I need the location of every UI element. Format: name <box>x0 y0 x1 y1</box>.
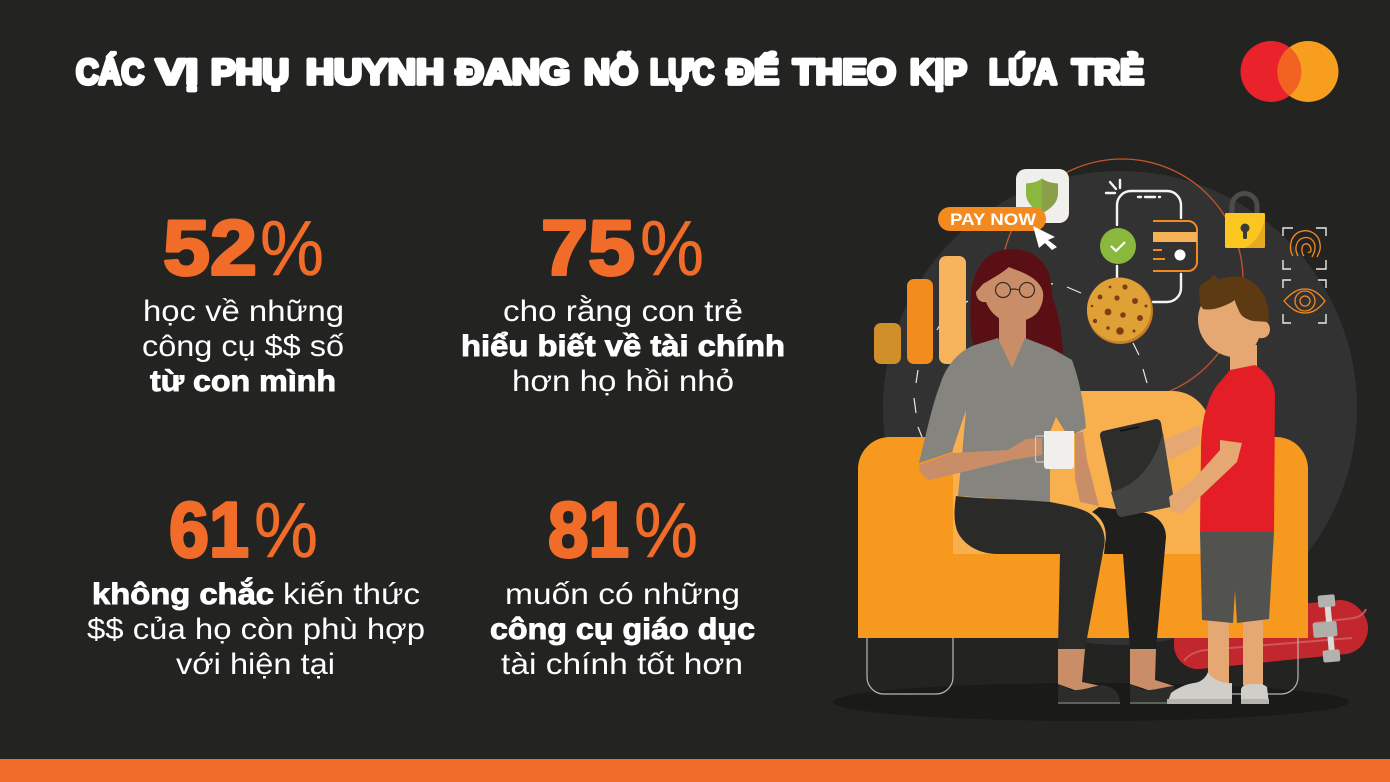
stat: 75% <box>461 204 785 398</box>
title <box>76 52 1144 92</box>
stat: 81% <box>490 486 755 681</box>
hair <box>970 249 1063 353</box>
icon: padlock <box>1225 194 1265 248</box>
title: ĐANG <box>456 53 570 92</box>
legs <box>1208 615 1263 688</box>
icon: eye scan <box>1283 280 1326 323</box>
left arm <box>919 438 1042 480</box>
stat: 75%: hiểu biết về tài chính <box>461 330 785 363</box>
title: TRẺ <box>1072 52 1144 92</box>
right forearm <box>1075 432 1099 506</box>
neck <box>1230 345 1257 373</box>
lower legs <box>1058 649 1174 692</box>
shorts <box>1200 532 1274 623</box>
ground shadow <box>833 683 1349 721</box>
title: HUYNH <box>306 53 444 92</box>
background circle <box>883 171 1357 645</box>
title: LỰC <box>650 53 714 92</box>
icon: bar chart <box>874 256 966 364</box>
stat: 52% <box>142 204 344 398</box>
skateboard <box>1174 594 1368 669</box>
title: VỊ <box>156 53 198 92</box>
front arm <box>1169 440 1242 513</box>
stat: 75%: hơn họ hồi nhỏ <box>512 365 734 398</box>
stat: 61%: không chắc <box>92 577 274 611</box>
tablet <box>1100 419 1174 517</box>
stat: 52%: 52 <box>163 204 257 292</box>
title: LỨA <box>989 52 1057 92</box>
stat: 75%: cho rằng con trẻ <box>503 295 743 328</box>
sofa legs <box>867 637 1298 694</box>
stat: 81%: % <box>634 486 698 574</box>
glasses <box>996 282 1034 298</box>
sofa <box>858 391 1308 638</box>
stat: 52%: công cụ $$ số <box>142 330 344 363</box>
title: PHỤ <box>211 53 289 92</box>
dashed orbit ring <box>914 283 1147 437</box>
hair <box>1199 275 1269 322</box>
shirt <box>919 338 1086 502</box>
stat: 81%: công cụ giáo dục <box>490 613 755 646</box>
neck <box>999 312 1026 370</box>
stat: 81%: tài chính tốt hơn <box>501 648 743 681</box>
button: pay now <box>938 207 1046 231</box>
stat: 75%: % <box>640 204 704 292</box>
shoes <box>1058 684 1182 704</box>
woman <box>919 249 1182 704</box>
icon: cursor arrow <box>1033 226 1057 250</box>
mug <box>1036 431 1074 469</box>
stat: 75%: 75 <box>541 204 635 292</box>
orange orbit ring <box>1001 159 1243 401</box>
right leg <box>1092 507 1166 649</box>
red shirt <box>1200 365 1275 532</box>
title: NỖ <box>584 52 638 92</box>
stat: 61%: với hiện tại <box>176 648 335 681</box>
stat: 61%: $$ của họ còn phù hợp <box>87 613 425 646</box>
footer bar <box>0 759 1390 782</box>
boy <box>1100 275 1275 704</box>
title: KỊP <box>910 53 967 92</box>
illustration: parent and child on sofa <box>833 159 1368 721</box>
back arm <box>1160 425 1200 460</box>
stat: 52%: học về những <box>143 295 344 328</box>
title: CÁC <box>76 52 144 92</box>
icon: shield tile <box>1016 169 1069 223</box>
head <box>1198 295 1270 357</box>
stat: 52%: từ con mình <box>150 365 336 398</box>
icon: fingerprint scan <box>1283 228 1326 269</box>
shoes <box>1167 672 1269 704</box>
button: pay now: PAY NOW <box>950 210 1037 229</box>
stat: 52%: % <box>260 204 324 292</box>
title: ĐỂ <box>727 52 779 92</box>
stat: 61% <box>87 486 425 681</box>
stat: 61%: % <box>254 486 318 574</box>
icon: check badge <box>1100 228 1136 264</box>
icon: phone outline <box>1106 180 1181 302</box>
title: THEO <box>793 53 896 92</box>
face <box>976 267 1043 322</box>
stat: 81%: muốn có những <box>505 578 740 611</box>
icon: Mastercard logo <box>1240 41 1338 102</box>
stat: 61%: 61 <box>169 486 249 574</box>
icon: payment card <box>1153 221 1197 271</box>
left leg <box>954 496 1105 649</box>
stat: 61%: kiến thức <box>283 578 420 611</box>
icon: cookie <box>1087 278 1153 344</box>
stat: 81%: 81 <box>548 486 629 574</box>
